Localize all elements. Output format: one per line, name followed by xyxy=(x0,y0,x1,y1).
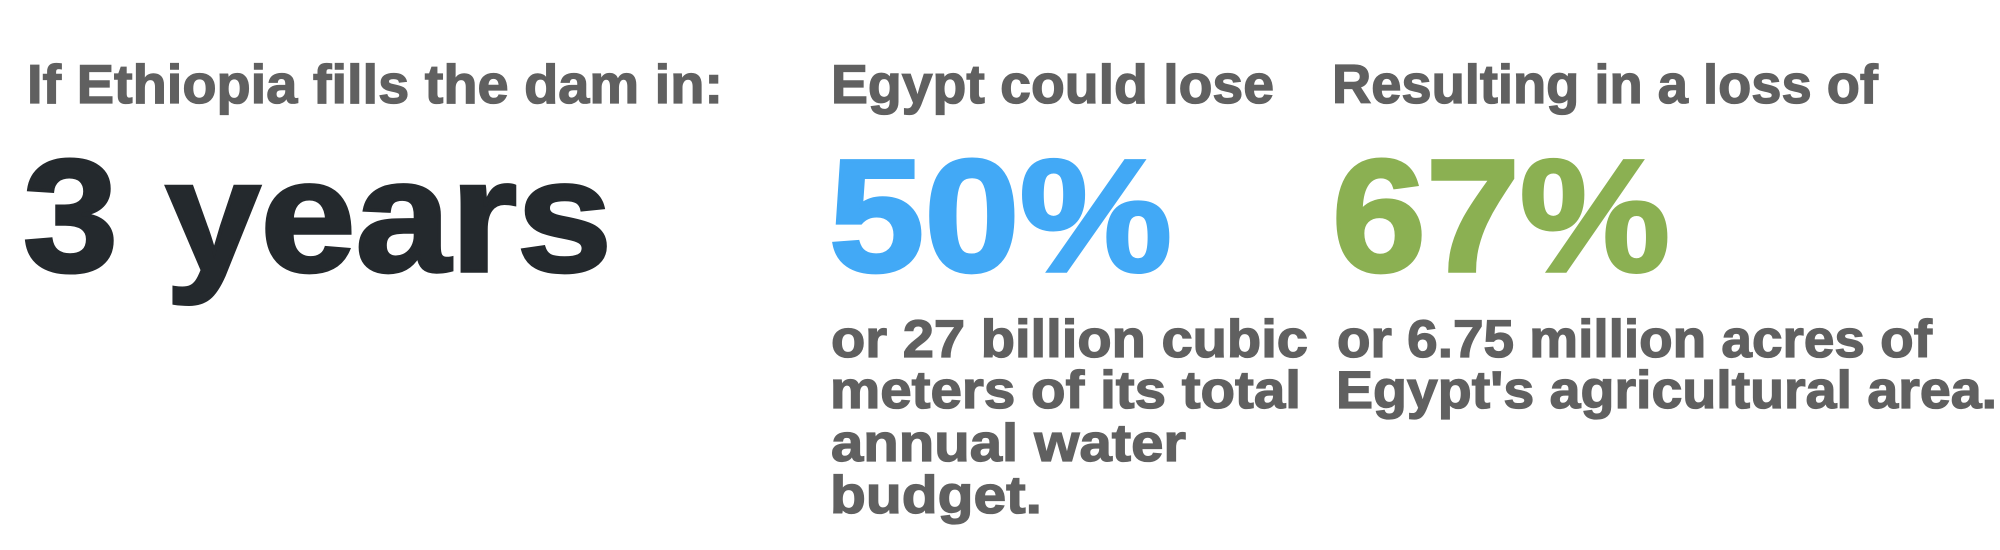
text block: water budget description: or 27 billion cubic xyxy=(831,310,1308,369)
panel: agricultural loss xyxy=(1332,53,1997,420)
heading: if Ethiopia fills the dam: If Ethiopia fills the dam in: xyxy=(27,53,723,115)
text block: water budget description: meters of its total xyxy=(830,361,1301,420)
text block: water budget description xyxy=(830,310,1308,525)
text block: water budget description: annual water xyxy=(831,414,1186,473)
text block: agricultural area description: Egypt's agricultural area. xyxy=(1336,361,1997,420)
big value: 67 percent: 67% xyxy=(1332,126,1670,305)
heading: Egypt could lose: Egypt could lose xyxy=(831,53,1274,115)
panel: fill duration xyxy=(23,53,723,305)
panel: water loss xyxy=(829,53,1308,525)
big value: 50 percent: 50% xyxy=(829,126,1172,305)
text block: agricultural area description: or 6.75 million acres of xyxy=(1337,310,1932,369)
text block: water budget description: budget. xyxy=(830,466,1042,525)
heading: resulting in a loss of: Resulting in a loss of xyxy=(1332,53,1879,115)
big value: 3 years: 3 years xyxy=(23,126,612,305)
text block: agricultural area description xyxy=(1336,310,1997,420)
